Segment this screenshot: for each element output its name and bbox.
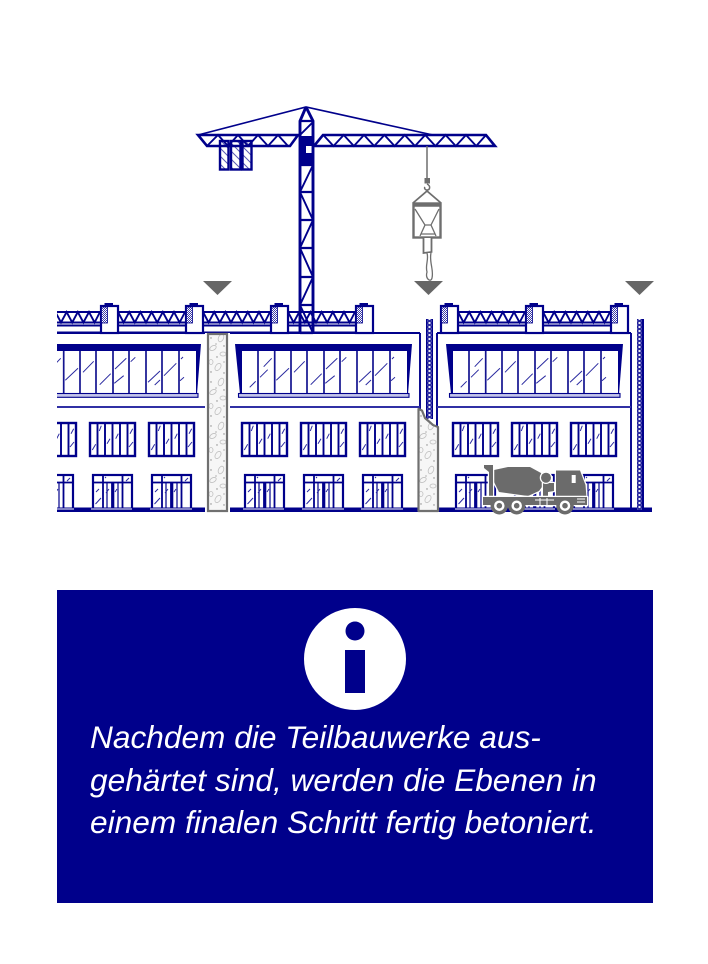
- concrete column left: [205, 333, 230, 513]
- text block: Nachdem die Teilbauwerke aus-: [90, 719, 541, 755]
- concrete column middle, partly poured: [418, 409, 438, 511]
- illustration: construction site: [15, 107, 654, 513]
- main jib: [314, 135, 495, 146]
- building right: [437, 333, 631, 510]
- buildings row: [15, 333, 631, 510]
- concrete mixer truck: [483, 465, 587, 513]
- icon: information: [304, 608, 406, 710]
- building middle: [226, 333, 420, 510]
- counterweight: [220, 141, 252, 170]
- concrete bucket on hoist: [413, 146, 441, 280]
- wheels: [492, 499, 572, 513]
- chute: [484, 465, 493, 497]
- tower crane: [198, 107, 495, 333]
- mixer drum: [494, 467, 544, 496]
- roof structure: [33, 303, 628, 333]
- drum support: [543, 483, 554, 498]
- ground line: [57, 508, 652, 512]
- rebar middle: [426, 319, 433, 419]
- info panel: [57, 590, 653, 903]
- cab: [556, 470, 586, 498]
- crane ties: [198, 107, 433, 135]
- text block: [90, 719, 597, 840]
- mast: [299, 107, 314, 333]
- counter jib: [198, 135, 298, 146]
- chassis: [483, 497, 587, 505]
- building left: [57, 334, 205, 508]
- rebar right: [637, 319, 644, 510]
- text block: gehärtet sind, werden die Ebenen in: [90, 762, 597, 798]
- text block: einem finalen Schritt fertig betoniert.: [90, 804, 597, 840]
- marker triangles: [203, 281, 654, 295]
